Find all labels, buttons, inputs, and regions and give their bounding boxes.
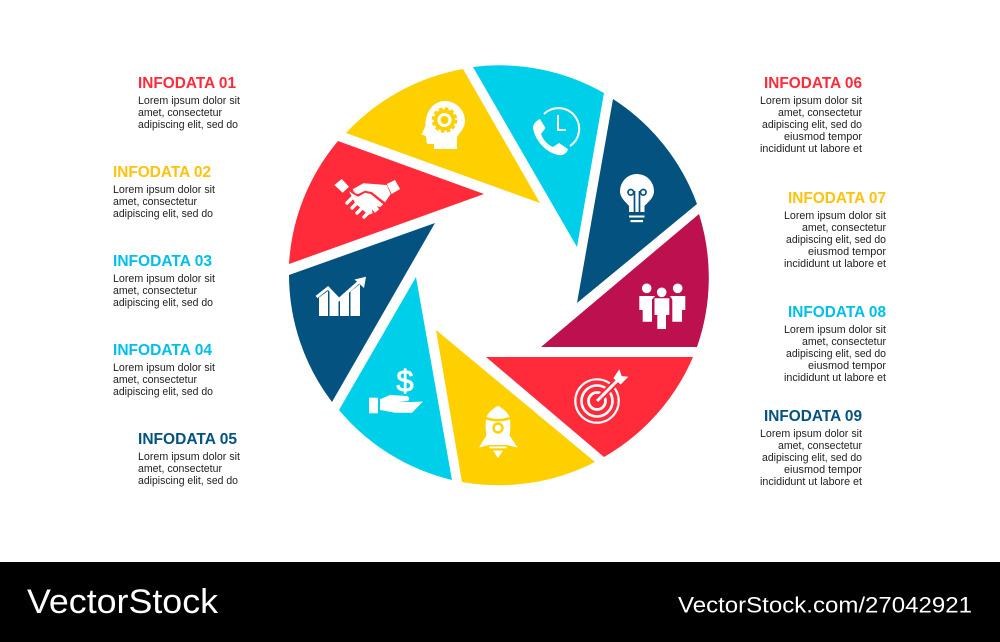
icon: hand holding dollar: $	[396, 364, 414, 398]
text block: INFODATA 03: Lorem ipsum dolor sit	[113, 273, 215, 285]
text block: INFODATA 02: Lorem ipsum dolor sit	[113, 184, 215, 196]
text block: INFODATA 01: amet, consectetur	[138, 107, 222, 119]
segment 4: cyan	[339, 277, 452, 480]
segment 2: red	[289, 141, 484, 264]
segment 7: crimson	[541, 214, 709, 347]
text block: INFODATA 01: Lorem ipsum dolor sit	[138, 95, 240, 107]
text block: INFODATA 04: Lorem ipsum dolor sit	[113, 362, 215, 374]
text block: INFODATA 04: INFODATA 04	[113, 342, 212, 359]
text block: INFODATA 07	[784, 190, 886, 270]
footer band	[0, 562, 1000, 642]
text block: INFODATA 07: eiusmod tempor	[808, 246, 886, 258]
text block: INFODATA 06: Lorem ipsum dolor sit	[760, 95, 862, 107]
footer logo: VectorStock	[27, 583, 219, 621]
icon: light bulb	[620, 174, 654, 222]
text block: INFODATA 03: amet, consectetur	[113, 285, 197, 297]
text block: INFODATA 02: amet, consectetur	[113, 196, 197, 208]
segment 8: navy	[577, 99, 697, 303]
icon: head with gear	[422, 101, 465, 149]
text block: INFODATA 07: incididunt ut labore et	[784, 258, 886, 270]
text block: INFODATA 08: Lorem ipsum dolor sit	[784, 324, 886, 336]
text block: INFODATA 07: amet, consectetur	[802, 222, 886, 234]
text block: INFODATA 01: INFODATA 01	[138, 75, 236, 92]
segment 3: navy	[289, 223, 435, 402]
icon: rocket	[479, 406, 518, 458]
text block: INFODATA 03	[113, 253, 215, 309]
text block: INFODATA 03: INFODATA 03	[113, 253, 212, 270]
text block: INFODATA 02	[113, 164, 215, 220]
text block: INFODATA 07: Lorem ipsum dolor sit	[784, 210, 886, 222]
text block: INFODATA 01	[138, 75, 240, 131]
icon: hand holding dollar	[369, 364, 423, 413]
text block: INFODATA 06: adipiscing elit, sed do	[762, 119, 862, 131]
text block: INFODATA 06: INFODATA 06	[764, 75, 862, 92]
text block: INFODATA 07: INFODATA 07	[788, 190, 886, 207]
icon: target with arrow	[575, 369, 628, 423]
text block: INFODATA 09: amet, consectetur	[778, 440, 862, 452]
segment 5: yellow	[436, 330, 595, 485]
icon: bar chart with rising arrow	[316, 277, 366, 316]
text block: INFODATA 07: adipiscing elit, sed do	[786, 234, 886, 246]
segment 9: cyan	[473, 65, 604, 247]
segment 1: yellow	[346, 69, 540, 203]
circular shutter chart	[289, 65, 709, 485]
text block: INFODATA 09: eiusmod tempor	[784, 464, 862, 476]
text block: INFODATA 08: eiusmod tempor	[808, 360, 886, 372]
text block: INFODATA 03: adipiscing elit, sed do	[113, 297, 213, 309]
icon: handshake	[334, 179, 400, 217]
text block: INFODATA 04: adipiscing elit, sed do	[113, 386, 213, 398]
text block: INFODATA 08: INFODATA 08	[788, 304, 886, 321]
text block: INFODATA 09: Lorem ipsum dolor sit	[760, 428, 862, 440]
text block: INFODATA 08: incididunt ut labore et	[784, 372, 886, 384]
text block: INFODATA 05: amet, consectetur	[138, 463, 222, 475]
text block: INFODATA 06: amet, consectetur	[778, 107, 862, 119]
text block: INFODATA 09: adipiscing elit, sed do	[762, 452, 862, 464]
text block: INFODATA 06: eiusmod tempor	[784, 131, 862, 143]
text block: INFODATA 05: adipiscing elit, sed do	[138, 475, 238, 487]
text block: INFODATA 09: INFODATA 09	[764, 408, 862, 425]
icon: phone and clock	[533, 108, 579, 155]
text block: INFODATA 08: amet, consectetur	[802, 336, 886, 348]
footer image id: VectorStock.com/27042921	[678, 592, 972, 618]
text block: INFODATA 06: incididunt ut labore et	[760, 143, 862, 155]
text block: INFODATA 04: amet, consectetur	[113, 374, 197, 386]
text block: INFODATA 09: incididunt ut labore et	[760, 476, 862, 488]
text block: INFODATA 08: adipiscing elit, sed do	[786, 348, 886, 360]
text block: INFODATA 05: Lorem ipsum dolor sit	[138, 451, 240, 463]
text block: INFODATA 01: adipiscing elit, sed do	[138, 119, 238, 131]
text block: INFODATA 02: adipiscing elit, sed do	[113, 208, 213, 220]
segment 6: red	[486, 357, 693, 457]
text block: INFODATA 08	[784, 304, 886, 384]
text block: INFODATA 09	[760, 408, 862, 488]
text block: INFODATA 02: INFODATA 02	[113, 164, 211, 181]
text block: INFODATA 05: INFODATA 05	[138, 431, 237, 448]
text block: INFODATA 04	[113, 342, 215, 398]
text block: INFODATA 06	[760, 75, 862, 155]
icon: three people	[639, 284, 685, 329]
text block: INFODATA 05	[138, 431, 240, 487]
